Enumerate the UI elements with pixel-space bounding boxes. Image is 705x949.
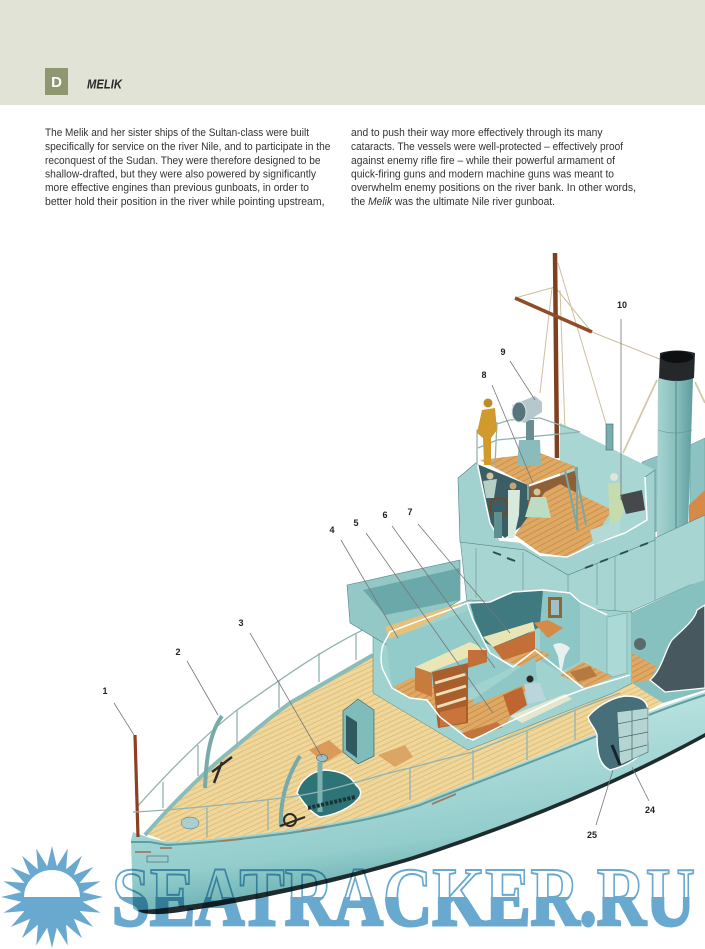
text block: left column bbox=[45, 127, 330, 208]
text block: right column: overwhelm enemy positions on the river bank. In other words, bbox=[351, 182, 636, 194]
text block: right column: the Melik was the ultimate Nile river gunboat. bbox=[351, 196, 555, 208]
forward davits and anchor gear bbox=[181, 716, 305, 829]
callout numbers: 6 bbox=[382, 510, 388, 520]
bridge outer wall with cutaway bbox=[458, 462, 655, 575]
watermark: site name bbox=[114, 868, 694, 928]
anchor well cutaway bbox=[297, 754, 361, 817]
callout numbers: 24 bbox=[645, 805, 655, 815]
text block: right column bbox=[351, 127, 636, 208]
port railing bbox=[136, 625, 373, 808]
ladder bbox=[565, 467, 586, 530]
port gunwale bbox=[145, 655, 373, 835]
callout numbers: 8 bbox=[481, 370, 487, 380]
callout numbers: 3 bbox=[238, 618, 244, 628]
forward cabin interior bbox=[386, 610, 572, 740]
callout numbers: 10 bbox=[617, 300, 627, 310]
searchlight bbox=[512, 396, 542, 466]
jackstaff bbox=[135, 735, 138, 837]
callout numbers: 4 bbox=[329, 525, 335, 535]
after deckhouse beyond funnel bbox=[642, 438, 705, 585]
text block: right column: against enemy rifle fire – while their powerful armament of bbox=[351, 155, 616, 167]
forward cabin walls bbox=[373, 600, 632, 750]
callout numbers: 5 bbox=[353, 518, 359, 528]
illustration: gunboat cutaway bbox=[131, 253, 705, 914]
callout numbers: 7 bbox=[407, 507, 413, 517]
text block: left column: The Melik and her sister ships of the Sultan-class were built bbox=[45, 127, 309, 139]
forward hatches and deck box bbox=[309, 699, 413, 767]
rear cabin interior bbox=[470, 590, 627, 688]
navigating platform bbox=[477, 418, 580, 530]
callout numbers: 1 bbox=[102, 686, 108, 696]
engine room and boiler bbox=[632, 580, 705, 703]
funnel bbox=[623, 350, 705, 540]
figure: officer in khaki bbox=[477, 398, 497, 465]
text block: right column: cataracts. The vessels were well-protected – effectively proof bbox=[351, 141, 624, 153]
callout numbers: 9 bbox=[500, 347, 506, 357]
hull cutaway: storage bbox=[588, 696, 648, 770]
callout numbers bbox=[102, 300, 655, 840]
starboard railing bbox=[133, 693, 620, 837]
text block: right column: and to push their way more effectively through its many bbox=[351, 127, 603, 139]
plate letter badge bbox=[45, 68, 68, 95]
text block: left column: shallow-drafted, but they were also powered by significantly bbox=[45, 168, 316, 180]
plate letter badge: D bbox=[51, 74, 62, 91]
text block: left column: reconquest of the Sudan. They were therefore designed to be bbox=[45, 155, 320, 167]
text block: right column: quick-firing guns and modern machine guns was meant to bbox=[351, 168, 614, 180]
text block: left column: more effective engines than previous gunboats, in order to bbox=[45, 182, 309, 194]
mast and yard bbox=[515, 253, 662, 458]
callout numbers: 25 bbox=[587, 830, 597, 840]
forward upper wing bbox=[347, 560, 463, 645]
lower deckhouse bbox=[460, 515, 705, 615]
deck planking bbox=[147, 655, 663, 842]
leader lines bbox=[114, 319, 649, 825]
figure and gun bbox=[590, 473, 645, 545]
figures: helmsman and crew bbox=[483, 472, 551, 538]
cutaway white edges bbox=[381, 590, 630, 740]
callout numbers: 2 bbox=[175, 647, 181, 657]
watermark: sun logo bbox=[1, 846, 103, 948]
heading: Melik: MELIK bbox=[87, 76, 123, 92]
text block: left column: better hold their position in the river while pointing upstream, bbox=[45, 196, 324, 208]
text block: left column: specifically for service on the river Nile, and to participate in the bbox=[45, 141, 330, 153]
bridge: back wall and floor bbox=[462, 423, 655, 560]
hull bbox=[131, 692, 705, 914]
header band bbox=[0, 0, 705, 105]
